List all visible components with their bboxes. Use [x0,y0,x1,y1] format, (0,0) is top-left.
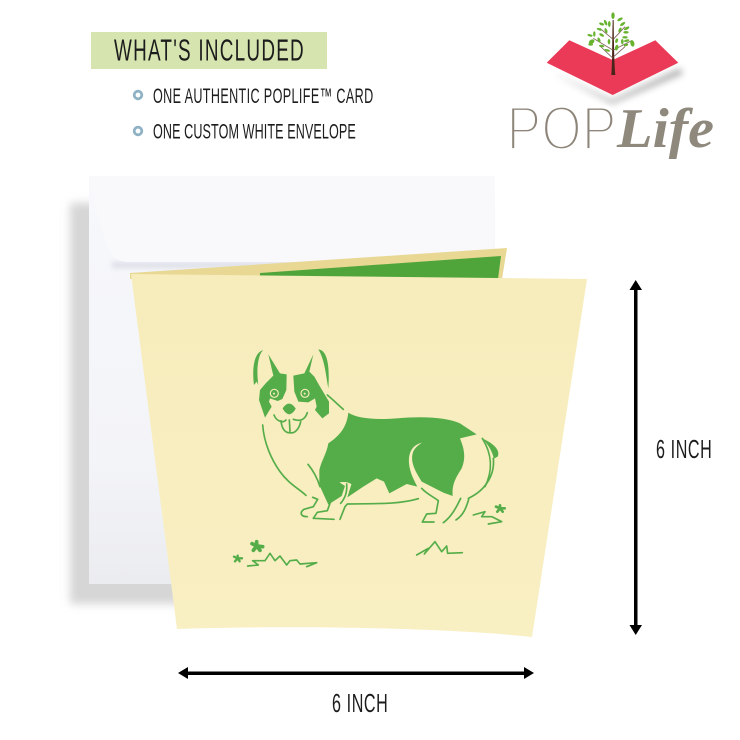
envelope [70,176,495,604]
corgi tail [482,438,498,459]
item: envelope: ONE CUSTOM WHITE ENVELOPE [153,119,356,143]
bullet: envelope [134,127,142,135]
horizontal dimension arrow [178,667,534,679]
logo wordmark Life: Life [616,98,714,160]
corgi nose [283,404,296,414]
envelope body [89,176,495,584]
card inner green layer [260,256,501,279]
logo book shadow [552,68,683,104]
envelope flap [89,176,495,262]
corgi left face patch [259,354,287,418]
logo: PopLife [506,12,714,164]
corgi cutout [234,349,505,567]
corgi body patch [319,413,477,505]
card back panel [130,248,507,279]
corgi left ear [253,350,263,385]
height label: 6 INCH [656,434,712,464]
corgi right ear [318,349,329,388]
heading: what's included: WHAT'S INCLUDED [114,34,304,68]
logo red open book [547,40,678,95]
list of included items [134,84,373,143]
corgi outline strokes [263,395,494,523]
bullet: card [134,91,142,99]
logo wordmark POP: POP [506,94,616,164]
corgi right face patch [293,354,329,418]
logo tree [587,12,635,75]
greeting card [130,248,587,637]
corgi eyes [270,389,309,397]
corgi flowers [234,505,505,561]
card front panel [131,274,587,637]
corgi grass tufts [248,512,502,567]
width label: 6 INCH [332,688,388,718]
item: card: ONE AUTHENTIC POPLIFE™ CARD [153,84,373,108]
vertical dimension arrow [630,280,642,635]
envelope shadow [70,203,430,604]
envelope flap shadow [112,262,494,268]
